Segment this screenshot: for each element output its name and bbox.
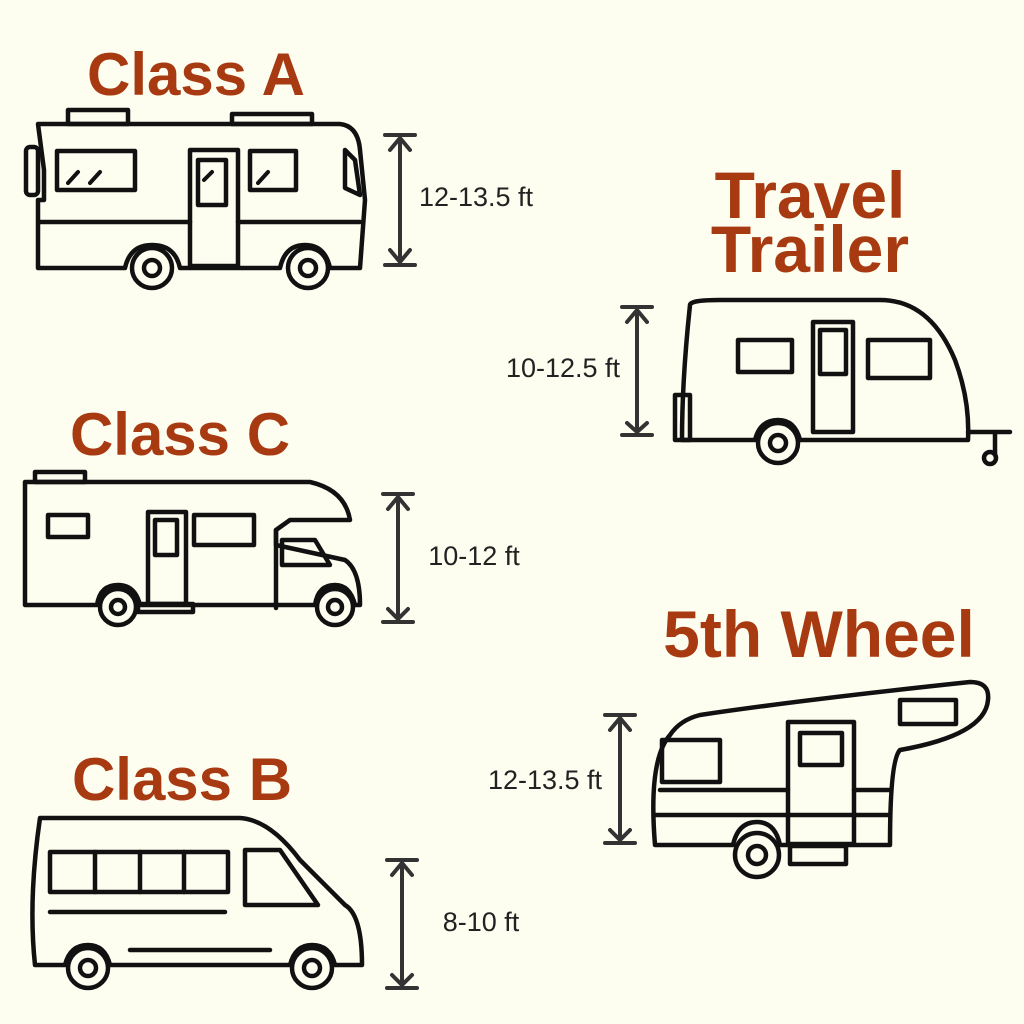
title: Class C: Class C [70,401,290,468]
arrow: Class A height [385,135,415,265]
label: trailer height: 10-12.5 ft [506,353,621,383]
title: Class B: Class B [72,746,292,813]
icon: 5th wheel [653,682,988,877]
title: 5th Wheel: 5th Wheel [663,597,975,671]
title: Travel Trailer: Travel [715,158,905,232]
arrow: Class C height [383,494,413,622]
label: Class C height: 10-12 ft [428,541,520,571]
arrow: 5th wheel height [605,715,635,843]
arrow: trailer height [622,307,652,435]
icon: Class A motorhome [26,110,365,288]
icon: travel trailer [675,300,1010,464]
title: Class A: Class A [87,41,305,108]
label: Class B height: 8-10 ft [443,907,520,937]
label: 5th wheel height: 12-13.5 ft [488,765,603,795]
icon: Class C motorhome [25,472,360,625]
arrow: Class B height [387,860,417,988]
label: Class A height: 12-13.5 ft [419,182,534,212]
icon: Class B van [32,818,362,988]
title: Travel Trailer: Trailer [711,212,909,286]
